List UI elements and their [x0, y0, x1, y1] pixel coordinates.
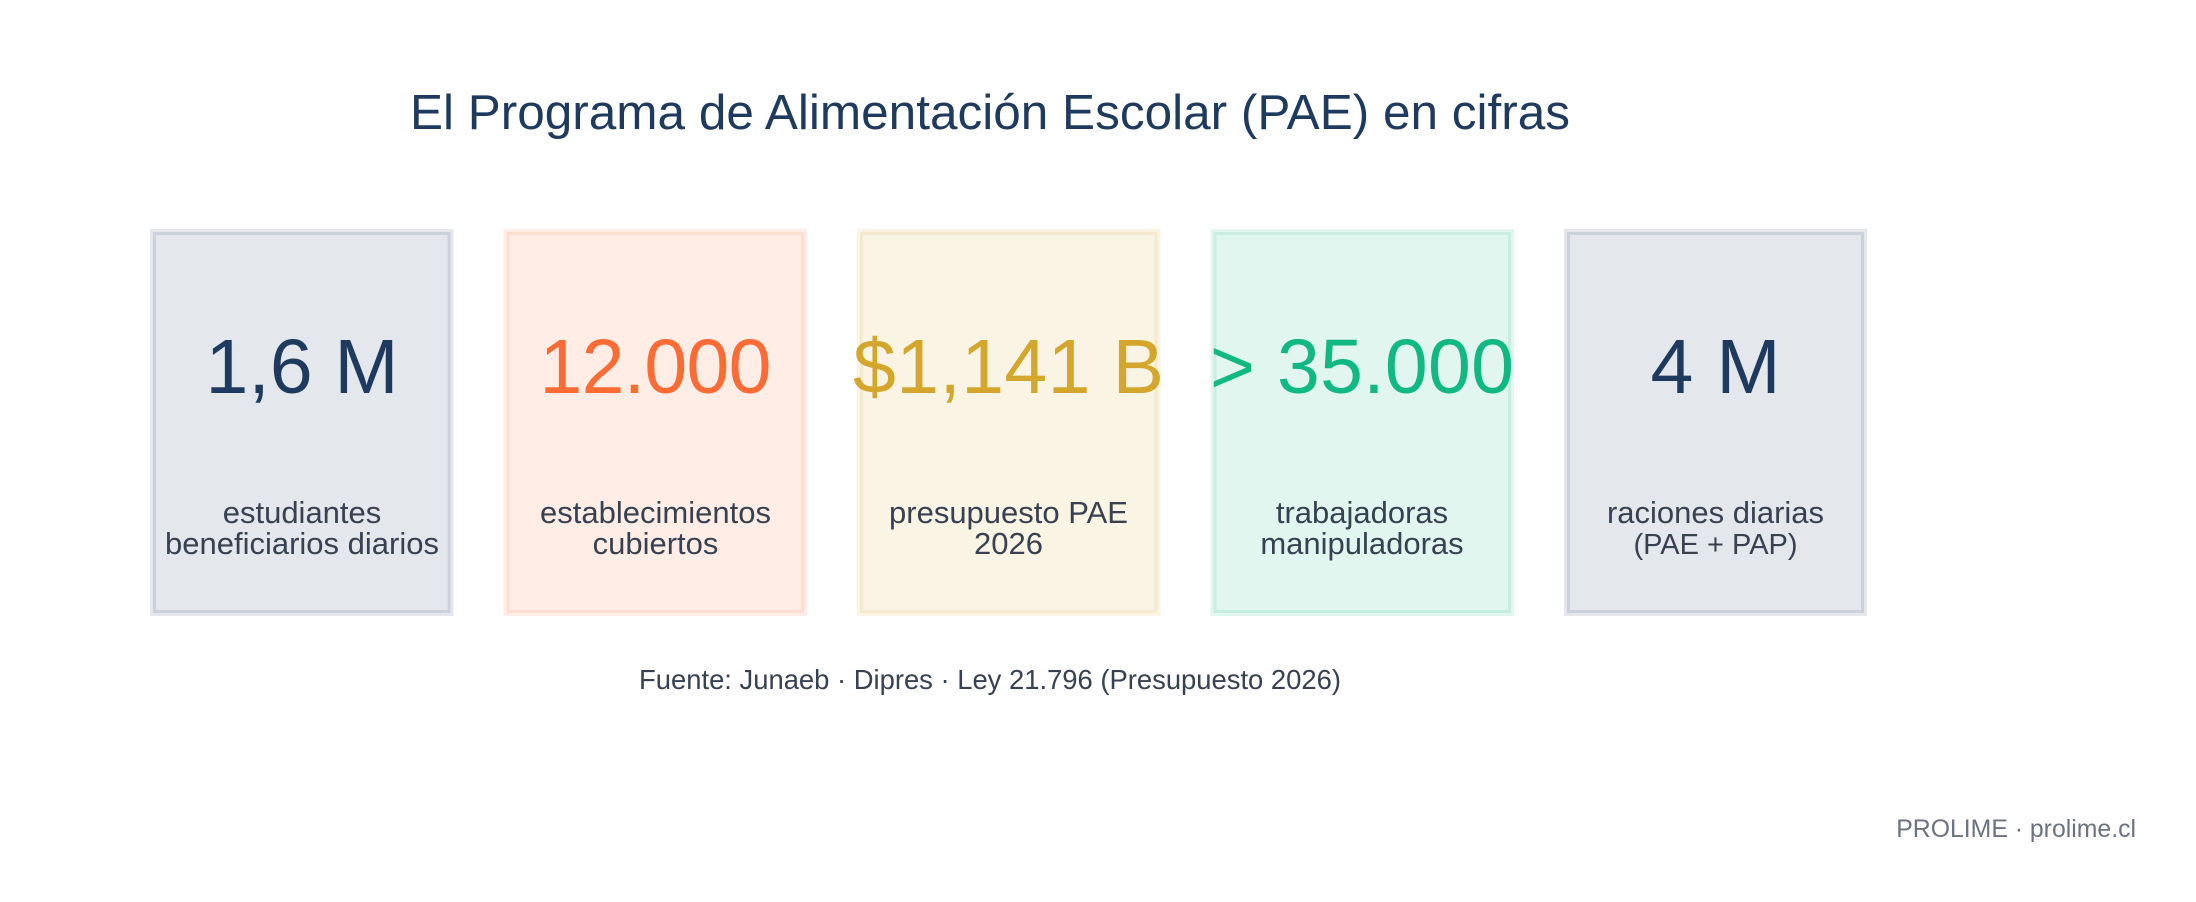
label: raciones diarias: raciones diarias [1607, 495, 1824, 530]
stat: $1,141 B: $1,141 B [853, 324, 1164, 410]
stat: > 35.000: > 35.000 [1210, 324, 1514, 410]
label: establecimientos cubiertos: cubiertos [593, 526, 718, 561]
source note: Fuente: Junaeb · Dipres · Ley 21.796 (Presupuesto 2026) [639, 664, 1341, 695]
label: trabajadoras manipuladoras: manipuladoras [1260, 526, 1464, 561]
stat: 4 M: 4 M [1650, 324, 1780, 410]
watermark: PROLIME · prolime.cl [1896, 816, 2136, 843]
stat: 12.000: 12.000 [540, 324, 772, 410]
panel: presupuesto [853, 232, 1164, 613]
panel: estudiantes [153, 232, 450, 613]
label: presupuesto PAE 2026: 2026 [974, 526, 1043, 561]
title: El Programa de Alimentación Escolar (PAE) en cifras [410, 85, 1570, 140]
label: estudiantes beneficiarios diarios: estudiantes [223, 495, 381, 530]
panel: trabajadoras [1210, 232, 1514, 613]
label: presupuesto PAE 2026: presupuesto PAE [889, 495, 1128, 530]
panel: raciones [1567, 232, 1864, 613]
label: establecimientos cubiertos: establecimientos [540, 495, 771, 530]
panel: establecimientos [506, 232, 804, 613]
label: raciones diarias: (PAE + PAP) [1633, 529, 1798, 561]
label: trabajadoras manipuladoras: trabajadoras [1276, 495, 1448, 530]
label: estudiantes beneficiarios diarios: beneficiarios diarios [165, 526, 439, 561]
stat: 1,6 M: 1,6 M [206, 324, 398, 410]
